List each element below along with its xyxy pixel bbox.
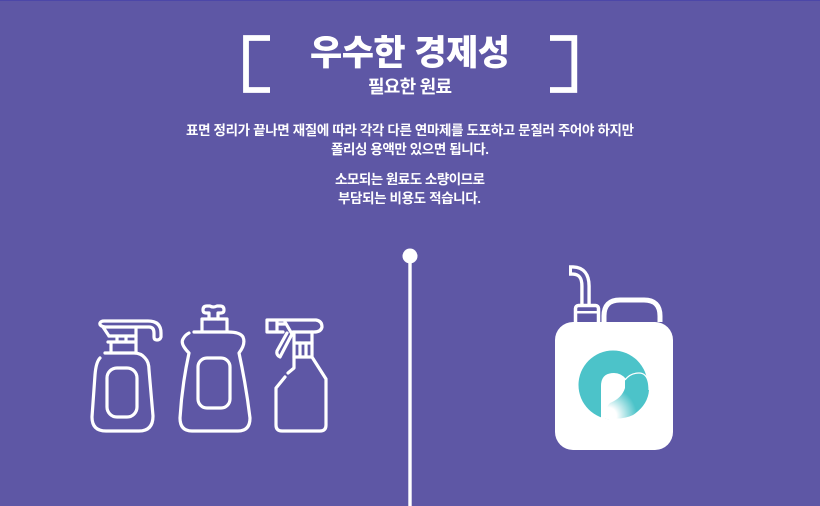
jug handle	[604, 300, 660, 322]
jug spout tube	[569, 270, 586, 306]
subtitle: 필요한 원료	[368, 77, 452, 97]
icon: rinse jug with logo	[555, 270, 673, 450]
title: 우수한 경제성	[310, 34, 510, 73]
description text: 폴리싱 용액만 있으면 됩니다.	[331, 142, 489, 157]
jug body	[555, 322, 673, 450]
description text: 부담되는 비용도 적습니다.	[338, 191, 481, 206]
left bracket	[246, 38, 270, 90]
icon: pump bottle	[92, 321, 161, 431]
center divider with dot	[402, 248, 418, 506]
description text: 소모되는 원료도 소량이므로	[335, 172, 485, 187]
right bracket	[550, 38, 574, 90]
jug neck	[576, 306, 598, 324]
description text	[186, 123, 635, 206]
logo	[578, 350, 649, 420]
header	[246, 34, 574, 97]
icons: conventional chemical bottles	[92, 306, 326, 431]
icon: spray bottle	[267, 320, 326, 431]
description text: 표면 정리가 끝나면 재질에 따라 각각 다른 연마제를 도포하고 문질러 주어야 하지만	[186, 123, 635, 138]
icon: dish soap bottle	[180, 306, 250, 431]
